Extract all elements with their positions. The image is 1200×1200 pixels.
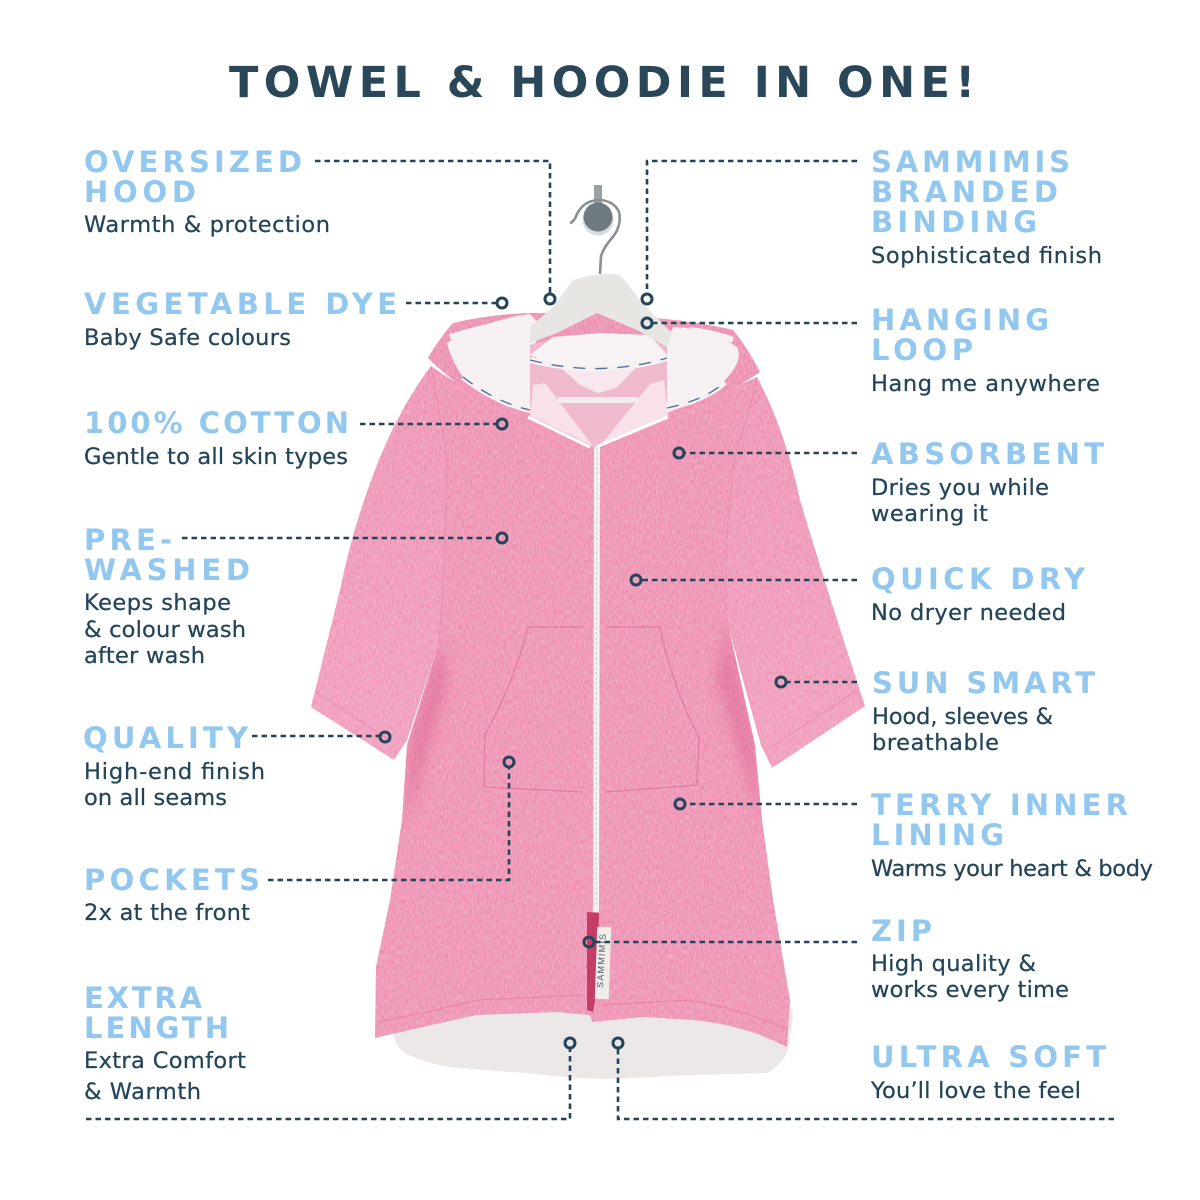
- callout: hanging loop: LOOP: [871, 333, 973, 367]
- callout: 100% cotton: [84, 406, 349, 470]
- panel: left features: [83, 145, 397, 1105]
- callout: pre-washed: & colour wash: [84, 617, 246, 643]
- title: TOWEL & HOODIE IN ONE!: [229, 58, 975, 108]
- callout: sun smart: breathable: [872, 730, 999, 756]
- callout: quick dry: QUICK DRY: [871, 562, 1086, 596]
- collar facings: [530, 383, 593, 446]
- callout: oversized hood: OVERSIZED: [84, 145, 302, 179]
- right sleeve: [726, 377, 865, 768]
- marker: oversized hood: [315, 161, 555, 304]
- callout: pockets: POCKETS: [84, 863, 260, 897]
- hood back pink: [428, 300, 760, 447]
- callout: sun smart: [872, 666, 1095, 756]
- callout: branded binding: [871, 145, 1102, 269]
- callout: absorbent: wearing it: [871, 501, 988, 527]
- callout: ultra soft: You’ll love the feel: [870, 1078, 1081, 1104]
- callout: zip: High quality &: [871, 951, 1036, 977]
- callout: vegetable dye: [84, 287, 397, 351]
- callout: pre-washed: [84, 523, 250, 669]
- callout: extra length: LENGTH: [84, 1011, 229, 1045]
- callout: sun smart: Hood, sleeves &: [872, 704, 1053, 730]
- callout: ultra soft: [870, 1040, 1106, 1104]
- hanging loop tag: [561, 368, 636, 393]
- marker: 100% cotton: [360, 419, 507, 429]
- marker: extra length: [86, 1038, 575, 1119]
- marker: terry inner lining: [675, 799, 857, 809]
- callout: hanging loop: HANGING: [871, 303, 1049, 337]
- callout: terry inner lining: [871, 788, 1153, 882]
- callout: terry inner lining: Warms your heart & body: [871, 856, 1153, 882]
- callout: vegetable dye: VEGETABLE DYE: [84, 287, 397, 321]
- product image: pink hooded towel on hanger: [311, 185, 865, 1079]
- sleeve hem and seam stitching: [316, 366, 857, 748]
- zip placket opening: [587, 912, 599, 1012]
- callout: vegetable dye: Baby Safe colours: [84, 325, 291, 351]
- callout: sun smart: SUN SMART: [872, 666, 1095, 700]
- marker: vegetable dye: [406, 298, 507, 308]
- callout: extra length: EXTRA: [84, 981, 203, 1015]
- terry inner lining hem: [393, 1000, 793, 1079]
- callout: 100% cotton: Gentle to all skin types: [84, 444, 348, 470]
- hanger: [530, 274, 672, 347]
- callout: pre-washed: PRE-: [84, 523, 172, 557]
- callout: absorbent: Dries you while: [871, 475, 1049, 501]
- infographic: [84, 65, 1152, 1120]
- marker: quality: [252, 732, 390, 742]
- callout: pre-washed: after wash: [84, 643, 205, 669]
- callout: quality: High-end finish: [84, 759, 265, 785]
- marker: branded binding: [642, 161, 857, 304]
- left sleeve: [311, 366, 447, 760]
- callout: absorbent: [871, 437, 1104, 527]
- callout: pre-washed: WASHED: [84, 553, 250, 587]
- callout: zip: [871, 914, 1069, 1003]
- label tag: [595, 927, 611, 999]
- callout: branded binding: BINDING: [871, 205, 1037, 239]
- zip: [596, 447, 597, 912]
- connector lines and markers: [86, 161, 1114, 1119]
- callout: absorbent: ABSORBENT: [871, 437, 1104, 471]
- callout: terry inner lining: TERRY INNER: [871, 788, 1128, 822]
- callout: quality: [83, 721, 265, 811]
- label tag: SAMMIMIS: [595, 934, 608, 988]
- marker: pre-washed: [182, 533, 507, 543]
- callout: zip: ZIP: [871, 914, 932, 948]
- marker: zip: [584, 937, 857, 947]
- callout: quick dry: [871, 562, 1086, 626]
- callout: extra length: [84, 981, 246, 1105]
- hem stitching: [378, 995, 788, 1030]
- callout: quality: QUALITY: [83, 721, 249, 755]
- hood lining white: [447, 314, 545, 413]
- branded binding tape: [450, 322, 733, 410]
- callout: pockets: 2x at the front: [84, 900, 250, 926]
- kangaroo pocket: [484, 627, 699, 792]
- callout: extra length: & Warmth: [84, 1079, 201, 1105]
- callout: hanging loop: Hang me anywhere: [871, 371, 1100, 397]
- callout: hanging loop: [871, 303, 1100, 397]
- callout: 100% cotton: 100% COTTON: [84, 406, 349, 440]
- callout: terry inner lining: LINING: [871, 818, 1004, 852]
- marker: quick dry: [631, 575, 857, 585]
- callout: oversized hood: HOOD: [84, 175, 196, 209]
- callout: quality: on all seams: [84, 785, 227, 811]
- marker: ultra soft: [613, 1038, 1114, 1119]
- icon: wall hook: [570, 185, 620, 274]
- callout: branded binding: SAMMIMIS: [871, 145, 1070, 179]
- panel: right features: [870, 145, 1153, 1104]
- callout: oversized hood: [84, 145, 330, 238]
- marker: sun smart: [776, 677, 857, 687]
- robe body: [375, 366, 790, 1047]
- marker: pockets: [268, 757, 514, 880]
- callout: extra length: Extra Comfort: [84, 1048, 246, 1074]
- callout: zip: works every time: [871, 977, 1069, 1003]
- callout: branded binding: BRANDED: [871, 175, 1058, 209]
- callout: pre-washed: Keeps shape: [84, 590, 231, 616]
- callout: ultra soft: ULTRA SOFT: [871, 1040, 1106, 1074]
- marker: absorbent: [674, 448, 857, 458]
- callout: quick dry: No dryer needed: [871, 600, 1066, 626]
- callout: pockets: [84, 863, 260, 926]
- neck opening: [530, 335, 667, 447]
- callout: branded binding: Sophisticated finish: [871, 243, 1102, 269]
- callout: oversized hood: Warmth & protection: [84, 212, 330, 238]
- marker: hanging loop: [642, 318, 857, 328]
- shadows under sleeves: [403, 629, 761, 814]
